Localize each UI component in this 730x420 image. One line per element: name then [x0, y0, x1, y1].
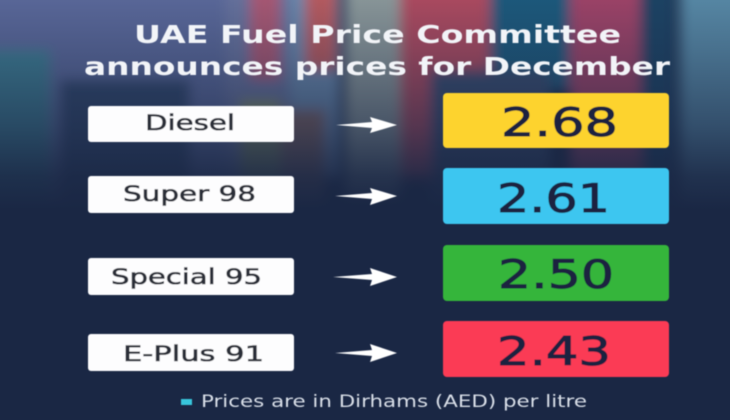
value: 2.68 — [443, 93, 669, 148]
arrow — [335, 344, 397, 362]
label: Super 98 — [88, 176, 294, 213]
title: UAE Fuel Price Committee — [134, 20, 621, 49]
value: 2.61: 2.61 — [497, 177, 610, 222]
label: E-Plus 91: E-Plus 91 — [123, 342, 264, 366]
label: Special 95 — [88, 258, 294, 295]
title — [84, 20, 671, 81]
value: 2.61 — [443, 168, 669, 224]
label: Diesel: Diesel — [145, 111, 235, 135]
footnote: Prices are in Dirhams (AED) per litre — [201, 392, 587, 412]
value: 2.50: 2.50 — [498, 253, 614, 298]
row: Special 95 — [88, 245, 669, 301]
arrow — [333, 268, 397, 286]
value: 2.43: 2.43 — [497, 330, 611, 375]
title: announces prices for December — [84, 52, 671, 81]
row: Super 98 — [88, 168, 669, 224]
arrow — [336, 117, 397, 133]
label: Diesel — [88, 106, 294, 142]
row: E-Plus 91 — [88, 321, 669, 377]
value: 2.68: 2.68 — [501, 101, 618, 146]
row: Diesel — [88, 93, 669, 148]
label: Super 98: Super 98 — [123, 182, 256, 206]
value: 2.43 — [443, 321, 669, 377]
value: 2.50 — [443, 245, 669, 301]
arrow — [335, 188, 397, 205]
label: Special 95: Special 95 — [111, 265, 262, 289]
label: E-Plus 91 — [88, 334, 294, 371]
